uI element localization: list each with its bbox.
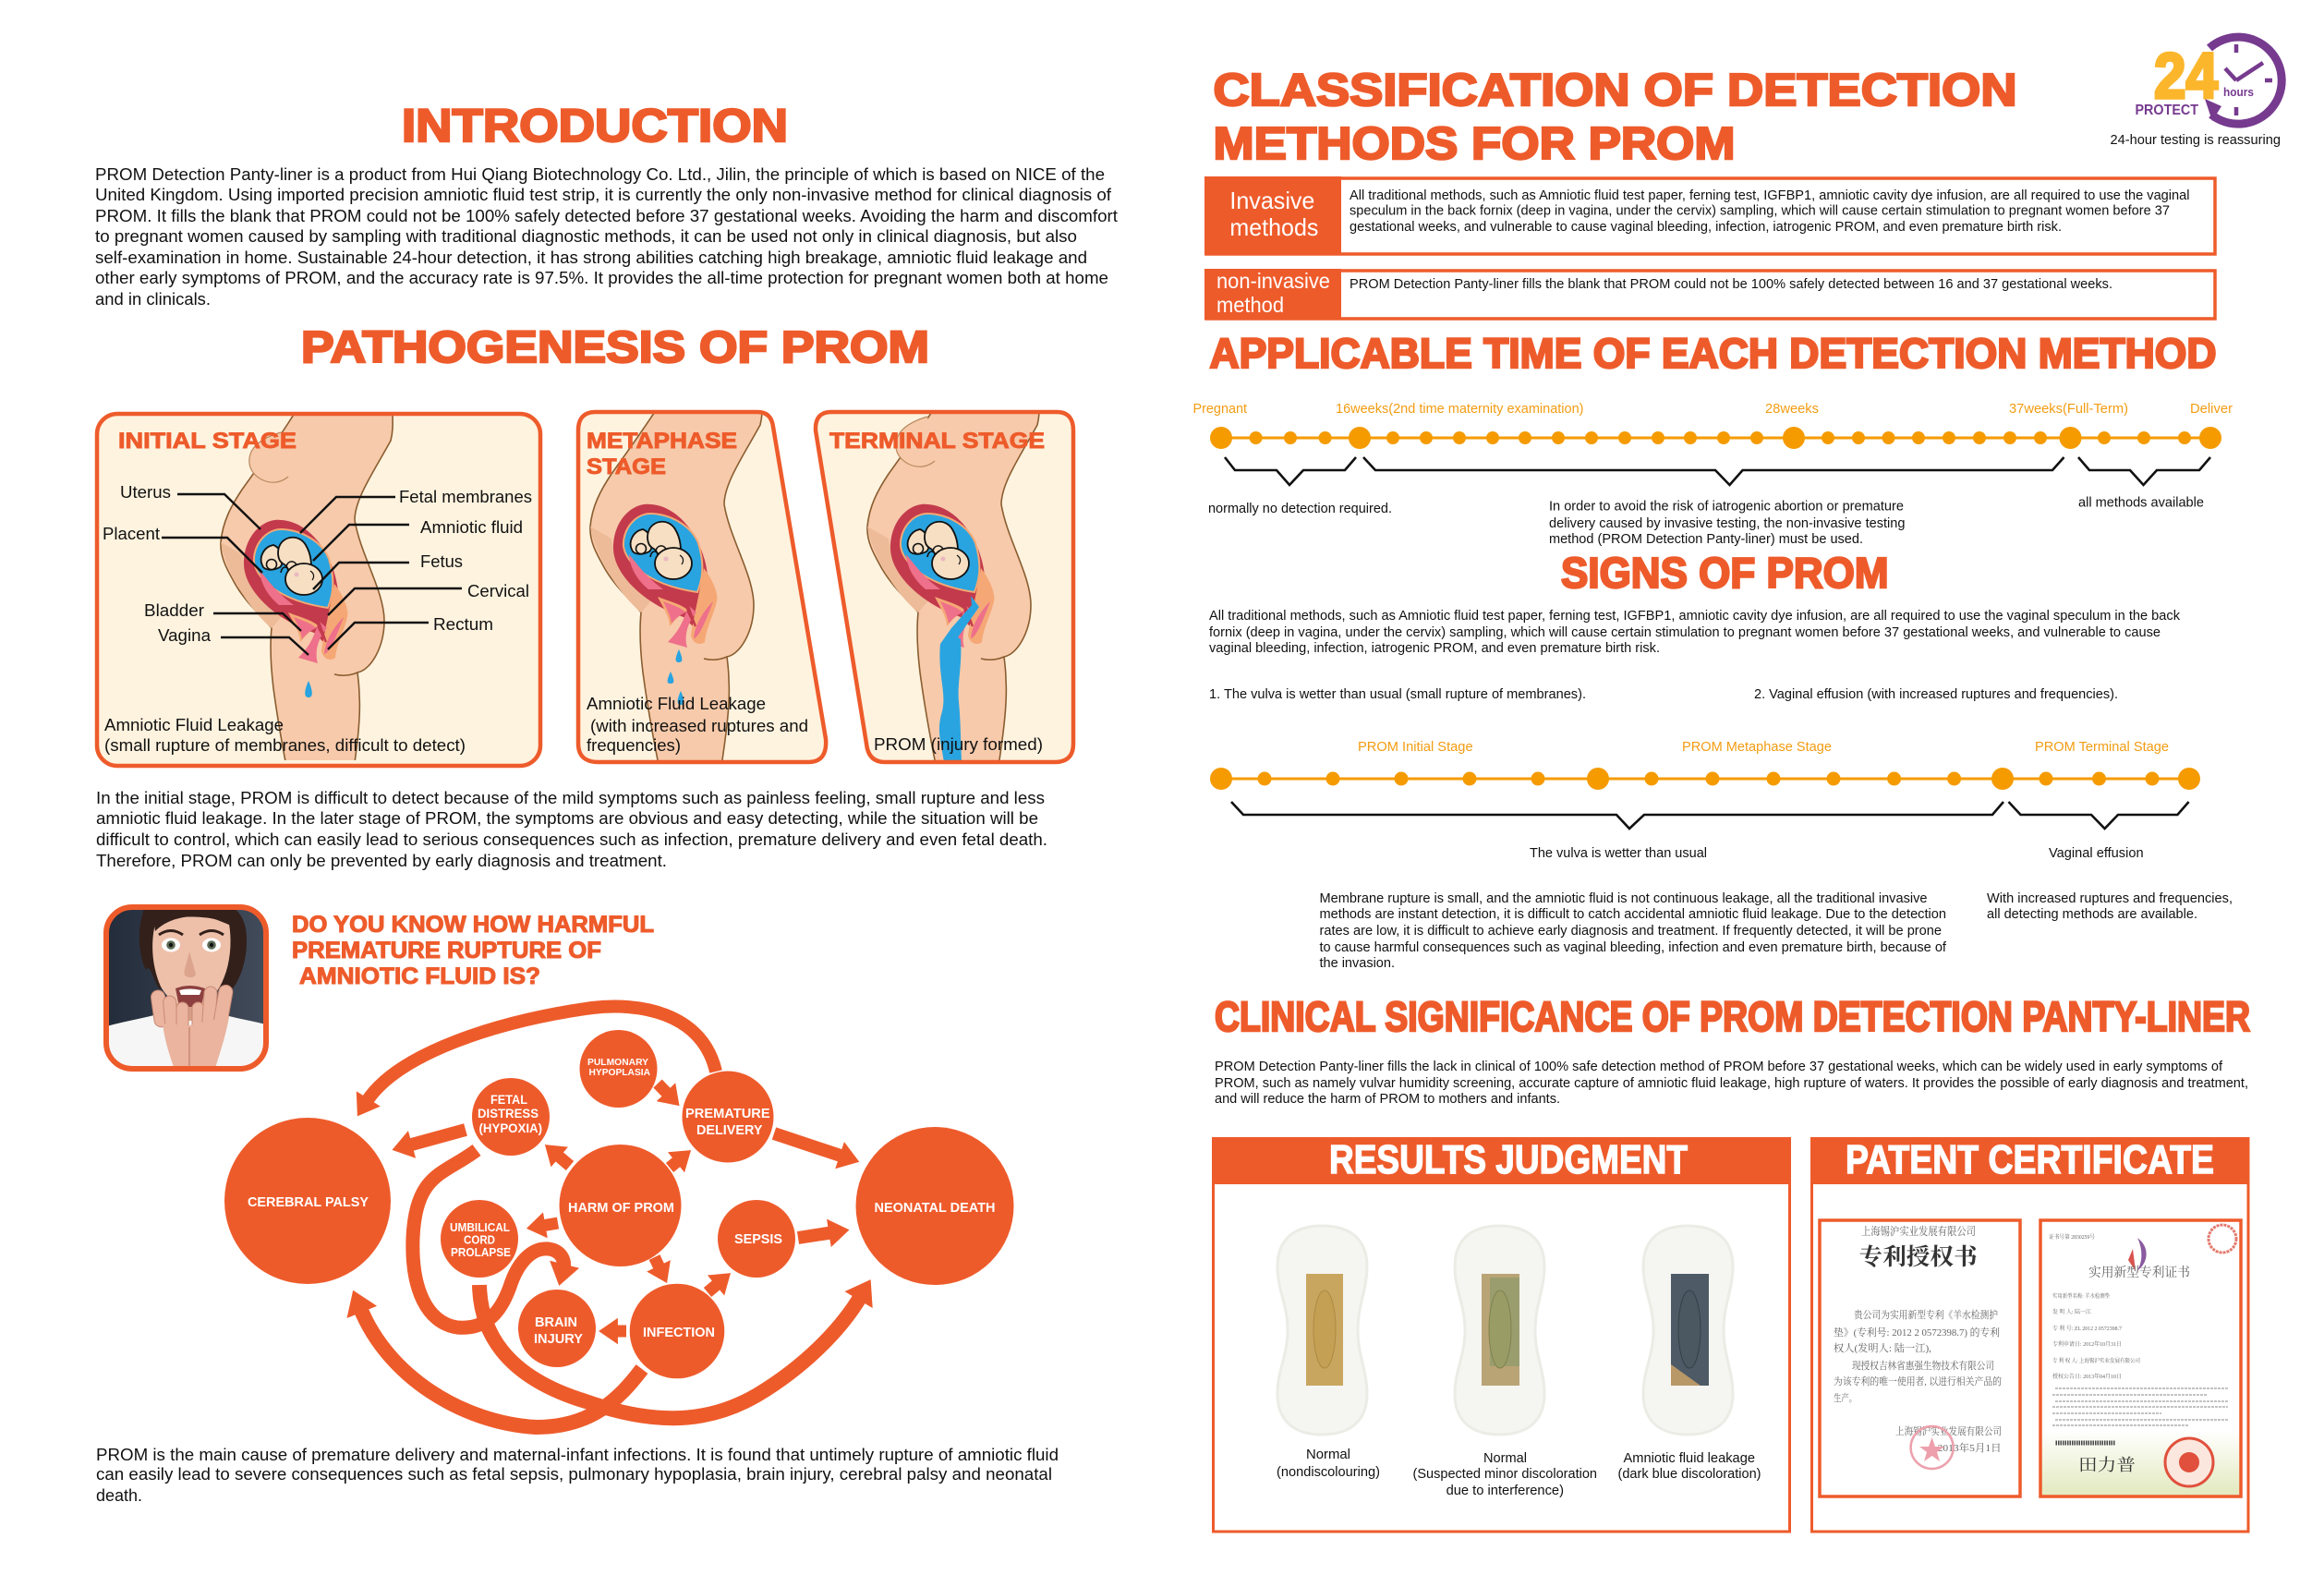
caption: metaphase stage: (with increased ruptures and bbox=[590, 717, 808, 735]
anatomy labels: Bladder bbox=[144, 601, 204, 620]
text block: clinical significance bbox=[1215, 1059, 2248, 1107]
text block: introduction: self-examination in home. Sustainable 24-hour detection, it has strong abilities catching high breakage, amniotic fluid leakage and bbox=[95, 248, 1087, 267]
anatomy labels: Fetal membranes bbox=[399, 488, 532, 506]
title: pathogenesis: PATHOGENESIS OF PROM bbox=[301, 323, 929, 372]
node: fetal distress: FETAL bbox=[490, 1093, 527, 1107]
panty-liner: normal bbox=[1277, 1226, 1367, 1435]
caption: initial stage: Amniotic Fluid Leakage bbox=[104, 716, 284, 734]
text block: signs bbox=[1209, 608, 2180, 702]
title: applicable time: APPLICABLE TIME OF EACH DETECTION METHOD bbox=[1210, 330, 2217, 377]
panel: metaphase stage bbox=[578, 397, 826, 779]
certificate: authorization letter: 为该专利的唯一使用者, 以进行相关产品的 bbox=[1834, 1375, 2002, 1387]
braces: timeline ranges bbox=[1225, 457, 2210, 485]
panel: results judgment: RESULTS JUDGMENT bbox=[1329, 1137, 1688, 1182]
node: neonatal death bbox=[855, 1127, 1014, 1285]
heading: terminal stage: TERMINAL STAGE bbox=[829, 429, 1045, 454]
logo: 24 hours protect: hours bbox=[2223, 85, 2254, 99]
text block: introduction: and in clinicals. bbox=[95, 290, 211, 309]
text block: increased ruptures: all detecting methods are available. bbox=[1987, 906, 2197, 922]
text block: introduction: PROM. It fills the blank that PROM could not be 100% safely detected before 37 gestational weeks. Avoiding the harm and discomfort bbox=[95, 207, 1118, 225]
logo: 24 hours protect bbox=[2136, 37, 2282, 124]
caption: terminal stage: PROM (injury formed) bbox=[874, 735, 1043, 754]
node: umbilical cord prolapse: UMBILICAL bbox=[450, 1221, 510, 1234]
certificate: authorization letter: 生产。 bbox=[1834, 1391, 1857, 1404]
text block: main cause: PROM is the main cause of premature delivery and maternal-infant infections. It is found that untimely rupture of amniotic fluid bbox=[96, 1446, 1059, 1464]
text block: membrane rupture bbox=[1319, 890, 1947, 971]
text block: membrane rupture: methods are instant detection, it is difficult to catch accidental amniotic fluid leakage. Due to the detection bbox=[1319, 906, 1946, 922]
illustration: metaphase stage body bbox=[590, 397, 762, 779]
text block: signs: vaginal bleeding, infection, iatrogenic PROM, and even premature birth risk. bbox=[1209, 640, 1660, 656]
anatomy leader lines bbox=[162, 494, 462, 655]
timeline: PROM stages bbox=[1210, 768, 2200, 790]
heading: do you know bbox=[292, 912, 654, 989]
caption: metaphase stage: Amniotic Fluid Leakage bbox=[587, 695, 766, 713]
caption: initial stage bbox=[104, 716, 466, 755]
panel: invasive methods: All traditional methods, such as Amniotic fluid test paper, ferning test, IGFBP1, amniotic cavity dye infusion, are all required to use the vaginal bbox=[1350, 188, 2189, 203]
anatomy labels: Vagina bbox=[158, 626, 212, 645]
caption: initial stage: (small rupture of membranes, difficult to detect) bbox=[104, 736, 466, 755]
text: normally no detection: normally no detection required. bbox=[1208, 501, 1392, 516]
node: pulmonary hypoplasia bbox=[580, 1030, 658, 1108]
panel: invasive methods bbox=[1204, 176, 2215, 255]
braces: stage ranges bbox=[1231, 802, 2189, 829]
caption: metaphase stage bbox=[587, 695, 808, 755]
node: sepsis: SEPSIS bbox=[734, 1231, 782, 1247]
text block: membrane rupture: to cause harmful consequences such as vaginal bleeding, infection and even premature birth, because of bbox=[1319, 939, 1947, 955]
timeline labels: stages: PROM Initial Stage bbox=[1358, 739, 1473, 755]
panty-liner: dark blue leakage bbox=[1643, 1226, 1733, 1435]
text block: clinical significance: and will reduce the harm of PROM to mothers and infants. bbox=[1215, 1091, 1560, 1107]
text block: introduction: United Kingdom. Using imported precision amniotic fluid test strip, it is currently the only non-invasive method for clinical diagnosis of bbox=[95, 186, 1112, 204]
certificate: utility model patent: 证书号第 2830259号 bbox=[2049, 1233, 2095, 1241]
text block: introduction bbox=[95, 165, 1118, 309]
anatomy labels bbox=[103, 483, 532, 645]
node: fetal distress: DISTRESS bbox=[478, 1107, 539, 1121]
title: classification bbox=[1214, 66, 2017, 169]
text block: stages summary bbox=[96, 789, 1047, 870]
text: wetter than usual: The vulva is wetter than usual bbox=[1530, 845, 1707, 861]
panty-liner: suspected minor discoloration bbox=[1455, 1226, 1544, 1435]
text block: membrane rupture: the invasion. bbox=[1319, 955, 1395, 971]
node: cerebral palsy bbox=[224, 1118, 391, 1284]
timeline labels: weeks: 28weeks bbox=[1765, 401, 1819, 417]
panel: non-invasive method: PROM Detection Panty-liner fills the blank that PROM could not be 100% safely detected between 16 and 37 gestational weeks. bbox=[1350, 276, 2112, 292]
text block: signs: 1. The vulva is wetter than usual (small rupture of membranes). bbox=[1209, 686, 1586, 702]
timeline labels: weeks: Deliver bbox=[2190, 401, 2233, 417]
certificate: authorization letter: 2013年5月1日 bbox=[1938, 1441, 2002, 1454]
caption: 24-hour testing: 24-hour testing is reassuring bbox=[2110, 132, 2281, 148]
node: infection bbox=[630, 1284, 724, 1378]
captions: results: due to interference) bbox=[1446, 1483, 1564, 1498]
node: sepsis bbox=[718, 1200, 795, 1278]
heading: do you know: AMNIOTIC FLUID IS? bbox=[299, 963, 540, 989]
panel: patent certificate: PATENT CERTIFICATE bbox=[1846, 1137, 2214, 1182]
node: fetal distress bbox=[472, 1078, 550, 1156]
certificate: utility model patent: 专利申请日: 2012年10月31日 bbox=[2052, 1340, 2122, 1348]
panel: invasive methods: gestational weeks, and vulnerable to cause vaginal bleeding, infection, iatrogenic PROM, and even premature birth risk. bbox=[1350, 219, 2062, 235]
text: vaginal effusion: Vaginal effusion bbox=[2049, 845, 2144, 861]
certificate: authorization letter: 垫》(专利号: 2012 2 0572398.7) 的专利 bbox=[1834, 1326, 2000, 1339]
timeline: pregnancy weeks bbox=[1210, 427, 2221, 449]
text block: introduction: PROM Detection Panty-liner is a product from Hui Qiang Biotechnology Co. Ltd., Jilin, the principle of which is based on NICE of the bbox=[95, 165, 1105, 184]
certificate: utility model patent: 田力普 bbox=[2078, 1456, 2136, 1474]
text: non-invasive must be used: In order to avoid the risk of iatrogenic abortion or premature bbox=[1549, 499, 1904, 514]
logo: 24 hours protect: PROTECT bbox=[2136, 103, 2198, 118]
timeline labels: stages bbox=[1358, 739, 2169, 755]
text block: increased ruptures: With increased ruptures and frequencies, bbox=[1987, 890, 2233, 906]
text block: clinical significance: PROM Detection Panty-liner fills the lack in clinical of 100% safe detection method of PROM before 37 gestational weeks, which can be widely used in early symptoms of bbox=[1215, 1059, 2223, 1074]
captions: results bbox=[1277, 1447, 1761, 1498]
heading: metaphase stage: METAPHASE bbox=[587, 429, 737, 454]
certificate: utility model patent: 实用新型名称: 羊水检测垫 bbox=[2052, 1292, 2110, 1300]
text block: signs: All traditional methods, such as Amniotic fluid test paper, ferning test, IGFBP1, amniotic cavity dye infusion, are all required to use the vaginal speculum in the back bbox=[1209, 608, 2180, 624]
node: harm of PROM bbox=[560, 1145, 682, 1266]
panel: terminal stage bbox=[816, 397, 1073, 779]
panel: initial stage bbox=[97, 413, 540, 794]
heading: initial stage: INITIAL STAGE bbox=[118, 429, 297, 454]
title: introduction: INTRODUCTION bbox=[402, 100, 788, 151]
certificate: authorization letter: 权人(发明人: 陆一江), bbox=[1834, 1341, 1931, 1354]
text block: stages summary: difficult to control, which can easily lead to serious consequences such as infection, premature delivery and even fetal death. bbox=[96, 830, 1047, 849]
caption: metaphase stage: frequencies) bbox=[587, 736, 681, 755]
title: classification: CLASSIFICATION OF DETECTION bbox=[1214, 66, 2017, 115]
diagram: harm of PROM bbox=[224, 1007, 1014, 1427]
title: signs of PROM: SIGNS OF PROM bbox=[1561, 549, 1888, 597]
logo: 24 hours protect: 24 bbox=[2154, 40, 2218, 112]
panel border bbox=[578, 412, 826, 762]
timeline labels: stages: PROM Metaphase Stage bbox=[1682, 739, 1832, 755]
panel: non-invasive method bbox=[1204, 269, 2215, 320]
anatomy labels: Fetus bbox=[420, 552, 463, 571]
anatomy labels: Uterus bbox=[120, 483, 171, 502]
captions: results: (dark blue discoloration) bbox=[1618, 1466, 1761, 1482]
node: pulmonary hypoplasia: HYPOPLASIA bbox=[589, 1067, 650, 1078]
text: non-invasive must be used bbox=[1549, 499, 1905, 547]
certificate: authorization letter: 现授权吉林省惠强生物技术有限公司 bbox=[1852, 1359, 1994, 1372]
text: non-invasive must be used: delivery caused by invasive testing, the non-invasive testing bbox=[1549, 515, 1905, 531]
heading: do you know: PREMATURE RUPTURE OF bbox=[292, 938, 601, 963]
panel: invasive methods: methods bbox=[1229, 213, 1318, 241]
node: premature delivery: DELIVERY bbox=[696, 1122, 763, 1138]
anatomy labels: Amniotic fluid bbox=[420, 518, 523, 537]
text block: stages summary: amniotic fluid leakage. In the later stage of PROM, the symptoms are obvious and easy detecting, while the situation will be bbox=[96, 809, 1038, 828]
text block: stages summary: Therefore, PROM can only be prevented by early diagnosis and treatment. bbox=[96, 852, 667, 870]
node: brain injury: INJURY bbox=[534, 1331, 583, 1347]
node: umbilical cord prolapse: CORD bbox=[464, 1234, 495, 1247]
text: non-invasive must be used: method (PROM Detection Panty-liner) must be used. bbox=[1549, 531, 1863, 547]
heading: metaphase stage bbox=[587, 429, 737, 479]
text: all methods available: all methods available bbox=[2078, 495, 2204, 511]
title: classification: METHODS FOR PROM bbox=[1214, 119, 1735, 169]
text block: membrane rupture: Membrane rupture is small, and the amniotic fluid is not continuous leakage, all the traditional invasive bbox=[1319, 890, 1927, 906]
curved arrows bbox=[360, 1007, 861, 1427]
text block: signs: 2. Vaginal effusion (with increased ruptures and frequencies). bbox=[1754, 686, 2118, 702]
straight arrows bbox=[408, 1084, 843, 1331]
certificate: authorization letter: 贵公司为实用新型专利《羊水检测护 bbox=[1854, 1308, 1998, 1321]
node: cerebral palsy: CEREBRAL PALSY bbox=[248, 1194, 369, 1210]
panel: invasive methods: speculum in the back fornix (deep in vagina, under the cervix) sampling, which will cause certain stimulation to pregnant women before 37 bbox=[1350, 203, 2170, 218]
certificate: authorization letter: 上海锡沪实业发展有限公司 bbox=[1895, 1424, 2002, 1437]
timeline labels: weeks: 37weeks(Full-Term) bbox=[2009, 401, 2128, 417]
text block: introduction: to pregnant women caused by sampling with traditional diagnostic methods, it can be used not only in clinical diagnosis, but also bbox=[95, 227, 1077, 246]
text block: signs: fornix (deep in vagina, under the cervix) sampling, which will cause certain stimulation to pregnant women before 37 gestational weeks, and vulnerable to cause bbox=[1209, 624, 2161, 640]
captions: results: (Suspected minor discoloration bbox=[1413, 1466, 1597, 1482]
panel border bbox=[816, 412, 1073, 762]
timeline labels: stages: PROM Terminal Stage bbox=[2035, 739, 2169, 755]
panel: non-invasive method: non-invasive bbox=[1216, 269, 1330, 293]
node: premature delivery: PREMATURE bbox=[685, 1106, 770, 1121]
certificate: utility model patent: 专 利 号: ZL 2012 2 0572398.7 bbox=[2052, 1325, 2122, 1332]
text block: membrane rupture: rates are low, it is difficult to achieve early diagnosis and treatment. If frequently detected, it will be prone bbox=[1319, 923, 1942, 939]
photo: worried woman bbox=[103, 907, 270, 1072]
panel border bbox=[97, 414, 540, 766]
timeline labels: weeks: Pregnant bbox=[1193, 401, 1248, 417]
panel: patent certificate bbox=[1810, 1137, 2250, 1532]
anatomy labels: Cervical bbox=[467, 582, 529, 600]
node: umbilical cord prolapse: PROLAPSE bbox=[451, 1246, 511, 1259]
certificate: authorization letter bbox=[1820, 1220, 2020, 1496]
node: brain injury: BRAIN bbox=[535, 1314, 577, 1330]
illustration: terminal stage body bbox=[867, 397, 1039, 779]
text block: stages summary: In the initial stage, PROM is difficult to detect because of the mild symptoms such as painless feeling, small rupture and less bbox=[96, 789, 1045, 807]
node: pulmonary hypoplasia: PULMONARY bbox=[587, 1057, 648, 1068]
certificate: utility model patent: 发 明 人: 陆一江 bbox=[2052, 1308, 2091, 1315]
text block: main cause: death. bbox=[96, 1486, 142, 1505]
node: fetal distress: (HYPOXIA) bbox=[478, 1121, 542, 1135]
captions: results: Amniotic fluid leakage bbox=[1624, 1450, 1755, 1466]
text block: main cause: can easily lead to severe consequences such as fetal sepsis, pulmonary hypoplasia, brain injury, cerebral palsy and neonatal bbox=[96, 1465, 1052, 1484]
captions: results: (nondiscolouring) bbox=[1277, 1464, 1380, 1480]
heading: do you know: DO YOU KNOW HOW HARMFUL bbox=[292, 912, 654, 938]
panel: results judgment bbox=[1212, 1137, 1791, 1532]
node: harm of PROM: HARM OF PROM bbox=[568, 1200, 674, 1216]
node: infection: INFECTION bbox=[643, 1325, 715, 1340]
certificate: utility model patent bbox=[2040, 1220, 2241, 1496]
certificate: utility model patent: 实用新型专利证书 bbox=[2088, 1265, 2190, 1280]
captions: results: Normal bbox=[1306, 1447, 1350, 1462]
panel: invasive methods: Invasive bbox=[1229, 187, 1314, 214]
certificate: utility model patent: 专 利 权 人: 上海锡沪实业发展有限公司 bbox=[2052, 1357, 2140, 1364]
timeline labels: weeks: 16weeks(2nd time maternity examination) bbox=[1336, 401, 1584, 417]
certificate: utility model patent: 授权公告日: 2013年04月10日 bbox=[2052, 1373, 2122, 1380]
anatomy labels: Placent bbox=[103, 525, 160, 543]
node: umbilical cord prolapse bbox=[441, 1200, 518, 1278]
panel: non-invasive method: method bbox=[1216, 293, 1284, 317]
text block: main cause bbox=[96, 1446, 1059, 1505]
certificate: authorization letter: 上海锡沪实业发展有限公司 bbox=[1861, 1224, 1976, 1238]
text block: introduction: other early symptoms of PROM, and the accuracy rate is 97.5%. It provides the all-time protection for pregnant women both at home bbox=[95, 269, 1108, 287]
node: premature delivery bbox=[682, 1072, 774, 1162]
text block: increased ruptures bbox=[1987, 890, 2233, 922]
timeline labels: weeks bbox=[1193, 401, 2233, 417]
heading: metaphase stage: STAGE bbox=[587, 454, 666, 479]
illustration: initial stage body bbox=[221, 413, 393, 794]
anatomy labels: Rectum bbox=[433, 615, 493, 634]
text block: clinical significance: PROM, such as namely vulvar humidity screening, accurate capture of amniotic fluid leakage, high rupture of waters. It provides the possible of early diagnosis and treatment, bbox=[1215, 1075, 2248, 1091]
node: brain injury bbox=[518, 1290, 596, 1367]
captions: results: Normal bbox=[1483, 1450, 1527, 1466]
certificate: authorization letter: 专利授权书 bbox=[1859, 1243, 1979, 1270]
node: neonatal death: NEONATAL DEATH bbox=[874, 1200, 996, 1216]
